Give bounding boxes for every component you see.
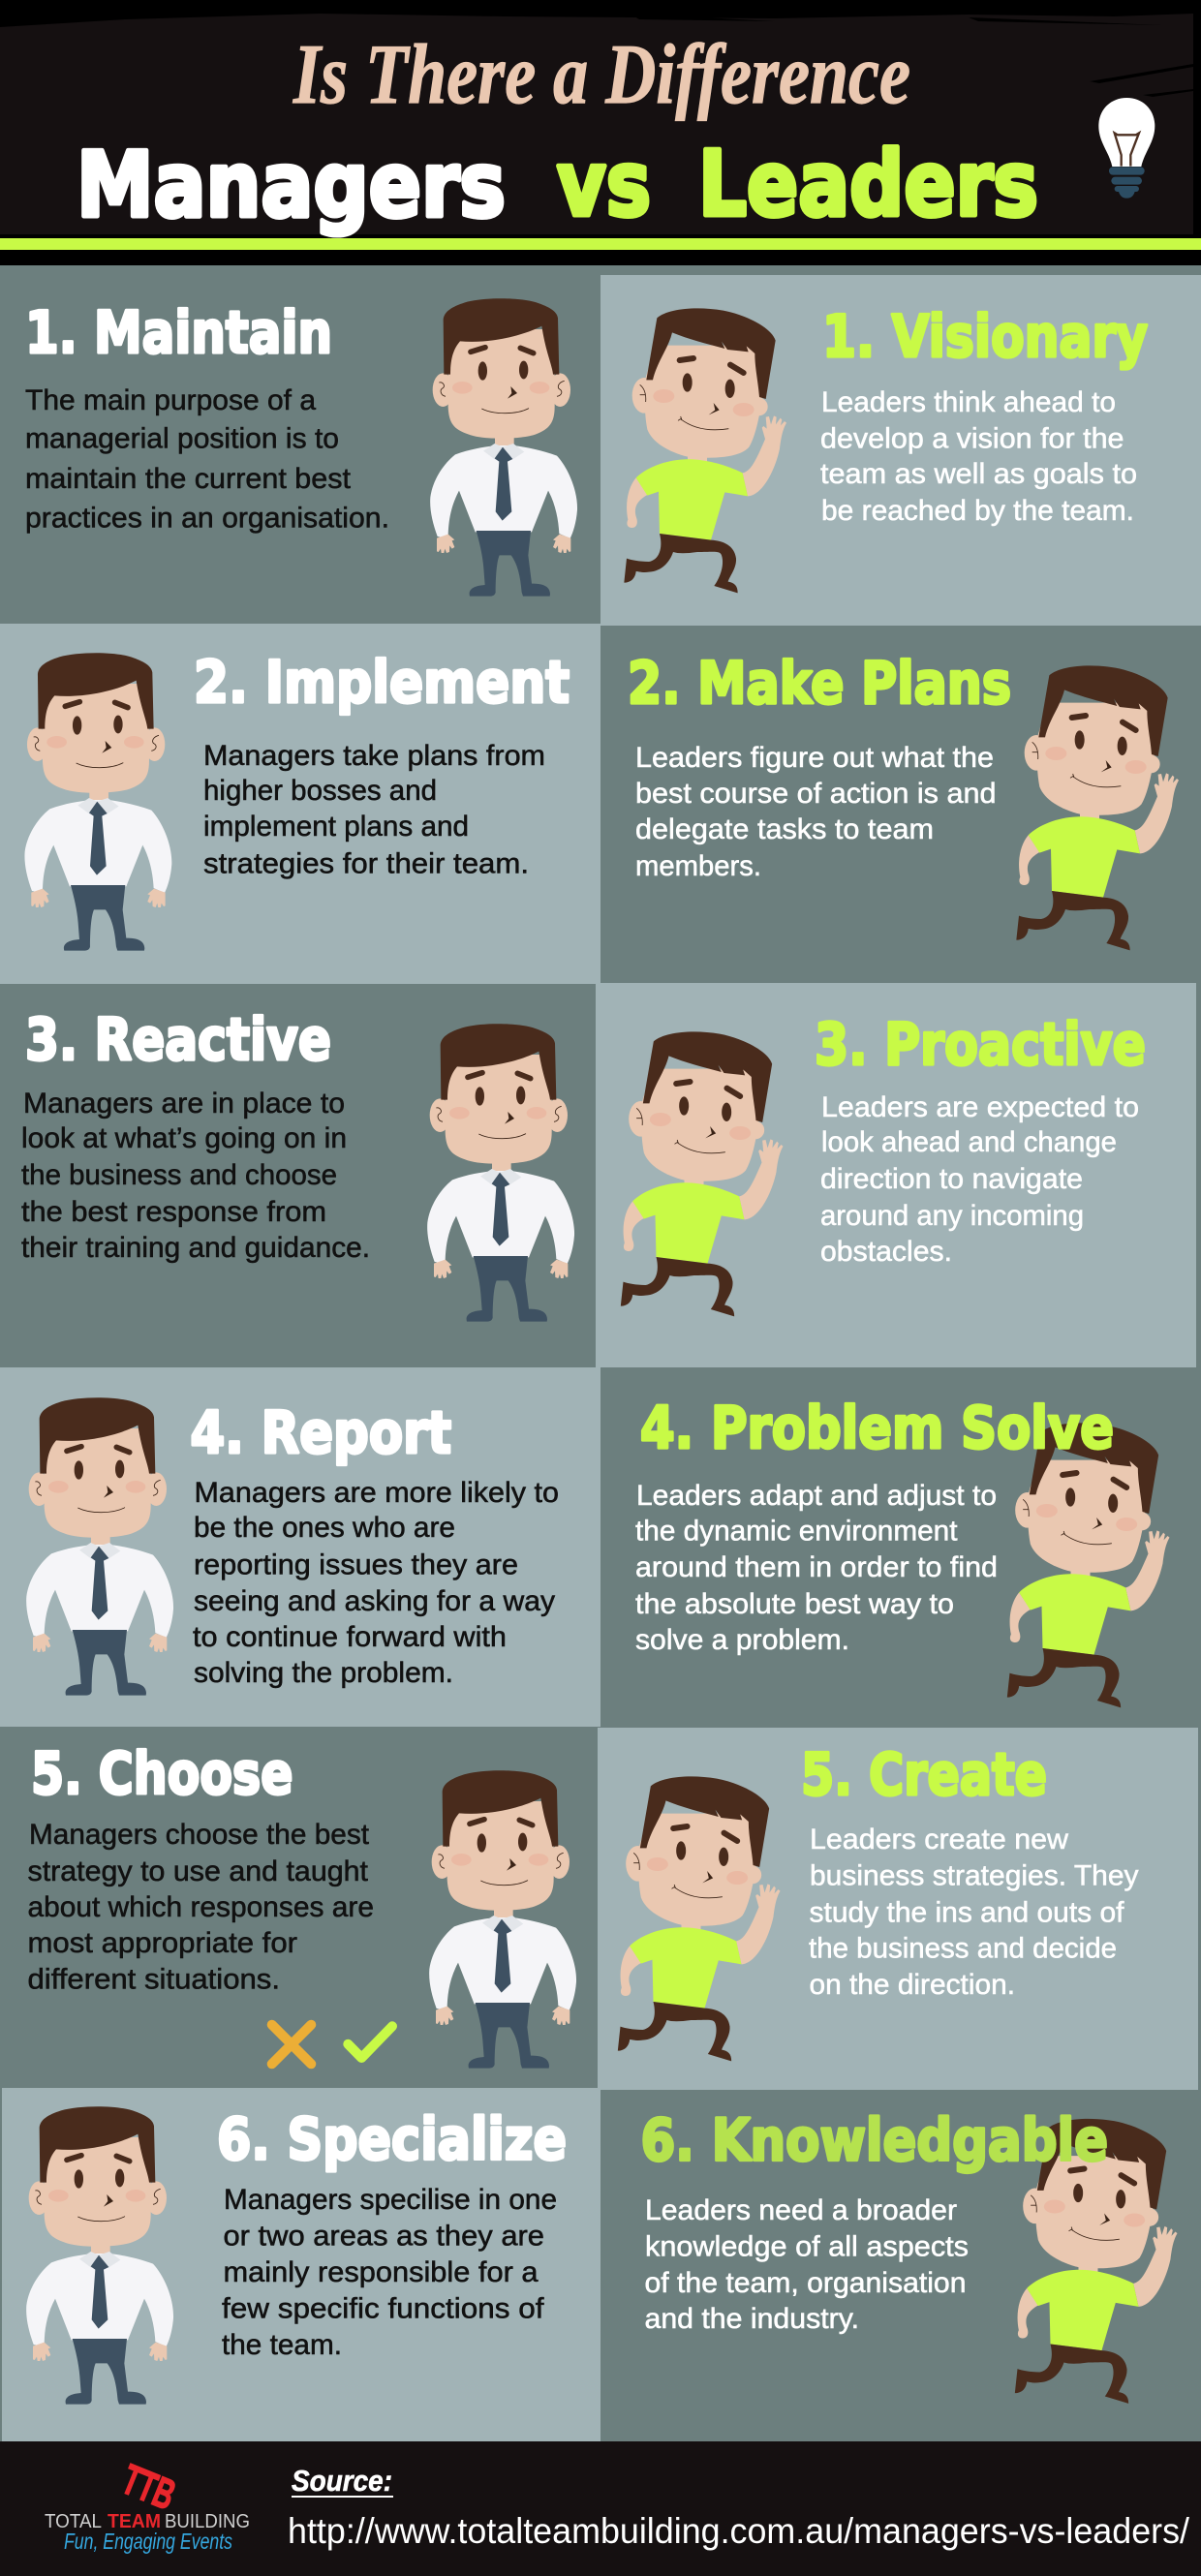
body text [635,742,996,882]
body text: or two areas as they are [223,2220,544,2253]
body text: the business and choose [21,1159,337,1191]
character: manager [427,1024,574,1322]
logo wordmark: TEAM [108,2511,161,2532]
heading: 1. Maintain [25,299,332,367]
body text: practices in an organisation. [25,502,389,534]
panel: manager 2 implement [0,624,600,984]
body text: Leaders are expected to [821,1091,1139,1123]
body text: seeing and asking for a way [194,1585,555,1617]
body text: be the ones who are [194,1512,455,1544]
body text [27,1819,374,1996]
body text: mainly responsible for a [223,2256,539,2288]
panel: manager 1 maintain [0,265,1201,626]
body text: the dynamic environment [635,1516,958,1548]
panel: leader 3 proactive [596,983,1201,1367]
character: leader [624,308,786,593]
body text: the best response from [21,1196,326,1228]
body text: Managers are more likely to [194,1477,559,1509]
body text: Managers take plans from [203,740,545,772]
heading: 1. Visionary [822,303,1148,371]
character: manager [26,1397,173,1696]
source label: Source: [292,2464,392,2498]
heading: 2. Implement [194,649,570,717]
body text: knowledge of all aspects [645,2231,969,2262]
panel: manager 4 report [0,1367,600,1727]
character: manager [429,1770,576,2069]
panel: manager 3 reactive [0,984,600,1367]
body text: around any incoming [820,1200,1084,1232]
panel: leader 1 visionary [600,275,1201,626]
body text: about which responses are [27,1891,374,1923]
character: manager [24,653,171,951]
body text [645,2194,969,2335]
panel: leader 2 make plans [600,626,1201,984]
logo wordmark: TOTAL [45,2511,102,2532]
body text: delegate tasks to team [635,813,934,845]
panel: leader 4 problem solve [600,1367,1201,1727]
icon: check mark [348,2026,392,2058]
body text: Managers specilise in one [224,2184,557,2216]
body text: Leaders create new [810,1824,1068,1855]
logo wordmark: BUILDING [165,2511,250,2532]
character: leader [1016,665,1179,950]
title: Managers: Managers [77,133,506,237]
body text: obstacles. [820,1236,952,1268]
body text: implement plans and [203,811,469,843]
title: Is There a Difference: Is There a Difference [293,28,910,122]
title: Leaders: Leaders [698,132,1038,236]
body text: the absolute best way to [635,1588,954,1620]
body text: Leaders figure out what the [635,742,994,774]
character: leader [621,1031,783,1316]
body text: managerial position is to [25,422,339,455]
body text: best course of action is and [635,778,996,810]
footer [0,2441,1201,2576]
body text [25,384,389,534]
logo tagline: Fun, Engaging Events [64,2529,232,2554]
panel: leader 6 knowledgable [600,2090,1201,2441]
body text: The main purpose of a [25,384,316,416]
body text: and the industry. [645,2303,859,2335]
source url: http://www.totalteambuilding.com.au/managers-vs-leaders/ [288,2511,1190,2551]
heading: 6. Specialize [217,2105,567,2173]
body text [193,1477,559,1689]
body text [222,2184,557,2361]
body text: be reached by the team. [821,495,1134,527]
body text [820,1091,1139,1268]
body text: on the direction. [810,1969,1015,2001]
body text: members. [635,850,761,882]
body text [820,386,1137,527]
body text: look ahead and change [821,1126,1117,1158]
body text: strategy to use and taught [27,1855,369,1887]
body text: Managers choose the best [29,1819,370,1851]
body text: develop a vision for the [820,422,1124,455]
body text: the team. [222,2329,342,2361]
heading: 3. Reactive [25,1006,331,1074]
heading: 6. Knowledgable [641,2107,1108,2175]
panel: leader 5 create [598,1727,1201,2090]
panel: manager 5 choose [0,1727,600,2089]
panel: manager 6 specialize [0,2088,600,2441]
character: manager [430,298,577,597]
body text: Leaders think ahead to [821,386,1116,418]
body text: to continue forward with [193,1621,507,1653]
body text: of the team, organisation [645,2267,967,2299]
body text [21,1088,370,1264]
character: leader [1007,1423,1169,1707]
body text: maintain the current best [25,463,352,495]
body text: Leaders need a broader [645,2194,957,2226]
logo: Total Team Building [45,2456,250,2554]
body text: higher bosses and [203,775,437,807]
body text: most appropriate for [27,1927,297,1959]
accent stripe [0,238,1201,250]
body text: the business and decide [809,1933,1117,1964]
body text [809,1824,1139,2001]
heading: 4. Report [190,1399,451,1467]
icon: light bulb [1098,98,1155,199]
body text: team as well as goals to [820,458,1137,490]
body text: their training and guidance. [21,1232,370,1264]
character: manager [26,2106,173,2405]
body text: business strategies. They [810,1859,1139,1891]
body text: look at what’s going on in [21,1122,347,1154]
icon: cross [272,2025,311,2064]
body text: few specific functions of [222,2293,544,2325]
body text: different situations. [27,1964,280,1996]
character: leader [1015,2119,1177,2404]
heading: 2. Make Plans [628,650,1011,718]
character: leader [618,1776,780,2061]
body text: Managers are in place to [23,1088,345,1119]
body text: reporting issues they are [194,1549,518,1580]
body text: Leaders adapt and adjust to [636,1480,997,1512]
title: vs: vs [557,132,651,236]
header banner [0,0,1201,265]
body text: around them in order to find [635,1551,998,1583]
body text [203,740,545,879]
heading: 5. Choose [31,1740,293,1808]
logo mark: TTB [115,2456,182,2520]
heading: 4. Problem Solve [640,1395,1114,1462]
body text [635,1480,998,1656]
body text: solving the problem. [194,1657,453,1689]
heading: 3. Proactive [815,1011,1146,1079]
body text: study the ins and outs of [810,1897,1124,1929]
body text: strategies for their team. [203,848,529,879]
body text: direction to navigate [820,1163,1083,1195]
logo wordmark [45,2511,250,2532]
body text: solve a problem. [635,1624,849,1656]
heading: 5. Create [801,1741,1047,1809]
